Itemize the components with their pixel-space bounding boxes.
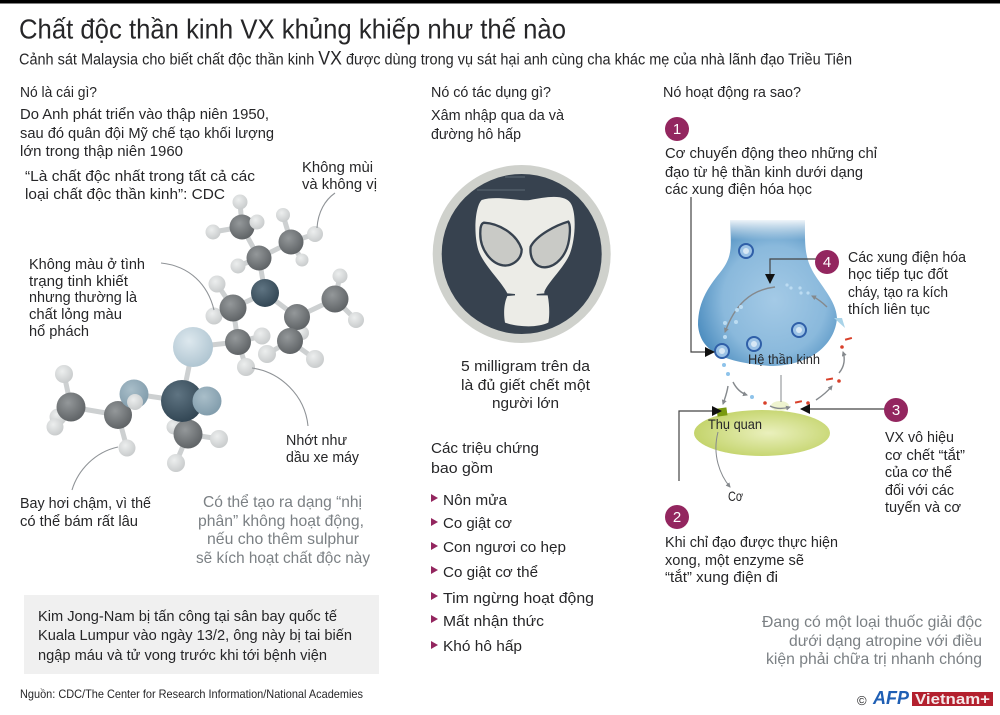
step 3: 3 xyxy=(892,402,900,419)
callout box: Kim Jong-Nam xyxy=(24,595,379,674)
text: lethal dose: người lớn xyxy=(492,395,559,412)
step 1: 1 xyxy=(673,121,681,138)
heading: what is it: Nó là cái gì? xyxy=(20,84,97,101)
step 3: đối với các xyxy=(885,482,954,499)
step 3: VX vô hiệu xyxy=(885,429,954,446)
note: binary form xyxy=(196,493,370,567)
step 1: các xung điện hóa học xyxy=(665,181,812,198)
heading: how it works: Nó hoạt động ra sao? xyxy=(663,84,801,101)
enzyme bud xyxy=(771,401,789,411)
step 4: 4 xyxy=(823,254,831,271)
step 2: “tắt” xung điện đi xyxy=(665,569,778,586)
text: origin xyxy=(20,106,274,160)
callout: colourless: hổ phách xyxy=(29,323,89,340)
step 4: thích liên tục xyxy=(848,301,930,318)
note: binary form: Có thể tạo ra dạng “nhị xyxy=(203,493,362,511)
step 4 xyxy=(815,249,967,318)
signal arrows xyxy=(716,287,844,487)
title: Chất độc thần kinh VX khủng khiếp như thế nào xyxy=(19,14,566,44)
step 4: học tiếp tục đốt xyxy=(848,266,949,283)
top border strip xyxy=(0,0,1000,4)
callout box: Kim Jong-Nam: ngập máu và tử vong trước khi tới bệnh viện xyxy=(38,647,327,664)
text: lethal dose: 5 milligram trên da xyxy=(461,358,591,375)
list: symptoms: Con ngươi co hẹp xyxy=(443,539,566,556)
note: binary form: sẽ kích hoạt chất độc này xyxy=(196,550,370,567)
neuron terminal xyxy=(698,218,845,366)
text: lethal dose: là đủ giết chết một xyxy=(461,377,591,394)
callout: colourless: trạng tinh khiết xyxy=(29,273,129,290)
text: origin: lớn trong thập niên 1960 xyxy=(20,143,183,160)
callout: viscous xyxy=(252,368,359,466)
arrow: step 1 to vesicle xyxy=(691,197,714,352)
muscle cell xyxy=(694,410,830,456)
step 1: đạo từ hệ thần kinh dưới dạng xyxy=(665,164,863,181)
text: lethal dose xyxy=(461,358,591,412)
callout: odourless: và không vị xyxy=(302,176,377,193)
neurotransmitter dots xyxy=(723,283,810,339)
note: binary form: phân” không hoạt động, xyxy=(198,513,364,530)
list: symptoms: Nôn mửa xyxy=(443,492,508,509)
callout: colourless xyxy=(29,256,214,340)
list: symptoms: Tim ngừng hoạt động xyxy=(443,590,594,607)
heading: symptoms: bao gồm xyxy=(431,460,493,477)
text: entry routes: Xâm nhập qua da và xyxy=(431,107,565,124)
panel: effects xyxy=(431,84,611,655)
quote: CDC xyxy=(25,168,255,203)
callout box: Kim Jong-Nam: Kuala Lumpur vào ngày 13/2, ông này bị tai biến xyxy=(38,627,352,644)
arrow: step 2 to receptor xyxy=(679,411,721,481)
text: entry routes: đường hô hấp xyxy=(431,126,521,143)
step 3: cơ chết “tắt” xyxy=(885,447,965,464)
step 3: tuyến và cơ xyxy=(885,499,961,516)
label: nervous system: Hệ thần kinh xyxy=(748,351,820,367)
callout: odourless xyxy=(302,159,377,228)
step 2: 2 xyxy=(673,509,681,526)
step 1: Cơ chuyển động theo những chỉ xyxy=(665,145,878,162)
text: entry routes xyxy=(431,107,565,143)
arrow: step 3 to cleft xyxy=(801,408,885,410)
quote: CDC: loại chất độc thần kinh”: CDC xyxy=(25,186,225,203)
step 1 xyxy=(665,117,878,198)
list: symptoms xyxy=(431,492,594,655)
synaptic vesicles xyxy=(715,244,806,358)
heading: symptoms xyxy=(431,440,539,477)
note: binary form: nếu cho thêm sulphur xyxy=(207,531,360,548)
note: antidote: kiện phải chữa trị nhanh chóng xyxy=(766,651,982,668)
step 3 xyxy=(884,398,965,516)
logo: AFP Vietnam+: © xyxy=(857,693,867,708)
callout: odourless: Không mùi xyxy=(302,159,373,176)
note: antidote xyxy=(762,614,982,668)
text: origin: Do Anh phát triển vào thập niên 1950, xyxy=(20,106,269,123)
callout: viscous: Nhớt như xyxy=(286,432,347,449)
source: Nguồn: CDC/The Center for Research Information/National Academies xyxy=(20,687,363,701)
step 2: Khi chỉ đạo được thực hiện xyxy=(665,534,838,551)
callout: colourless: nhưng thường là xyxy=(29,289,138,306)
list: symptoms: Mất nhận thức xyxy=(443,613,544,630)
note: antidote: dưới dạng atropine với điều xyxy=(789,633,982,650)
subtitle: Cảnh sát Malaysia cho biết chất độc thần kinh VX được dùng trong vụ sát hại anh cùng cha khác mẹ của nhà lãnh đạo Triều Tiên xyxy=(19,48,852,70)
callout: slow evaporation: Bay hơi chậm, vì thế xyxy=(20,495,152,512)
step 2: xong, một enzyme sẽ xyxy=(665,552,804,569)
label: muscle: Cơ xyxy=(728,488,743,504)
callout box: Kim Jong-Nam: Kim Jong-Nam bị tấn công tại sân bay quốc tế xyxy=(38,608,338,625)
synapse diagram xyxy=(679,197,885,504)
quote: CDC: “Là chất độc nhất trong tất cả các xyxy=(25,168,255,185)
panel: how it works xyxy=(663,84,982,668)
step 4: cháy, tạo ra kích xyxy=(848,284,948,301)
text: origin: sau đó quân đội Mỹ chế tạo khối lượng xyxy=(20,125,274,142)
logo: AFP Vietnam+ xyxy=(857,688,993,708)
list: symptoms: Khó hô hấp xyxy=(443,638,522,655)
callout: colourless: chất lỏng màu xyxy=(29,306,122,323)
callout: slow evaporation xyxy=(20,447,152,530)
list: symptoms: Co giật cơ xyxy=(443,515,512,532)
callout: viscous: dầu xe máy xyxy=(286,449,359,466)
callout: colourless: Không màu ở tình xyxy=(29,256,145,273)
step 3: của cơ thể xyxy=(885,464,952,481)
receptor xyxy=(716,407,728,417)
callout: slow evaporation: có thể bám rất lâu xyxy=(20,513,138,530)
logo: AFP Vietnam+: AFP xyxy=(872,688,910,708)
note: antidote: Đang có một loại thuốc giải độc xyxy=(762,614,982,631)
list: symptoms: Co giật cơ thể xyxy=(443,564,538,581)
step 2 xyxy=(665,505,838,586)
step 4: Các xung điện hóa xyxy=(848,249,967,266)
arrow: step 4 to neuron xyxy=(770,259,816,283)
logo: AFP Vietnam+: Vietnam+ xyxy=(915,691,990,708)
heading: effects: Nó có tác dụng gì? xyxy=(431,84,551,101)
VX red particles xyxy=(763,337,852,405)
heading: symptoms: Các triệu chứng xyxy=(431,440,539,457)
label: receptor: Thụ quan xyxy=(708,416,762,432)
icon: gas mask xyxy=(433,165,611,343)
panel: what is it xyxy=(20,84,377,567)
molecule model xyxy=(46,194,364,472)
